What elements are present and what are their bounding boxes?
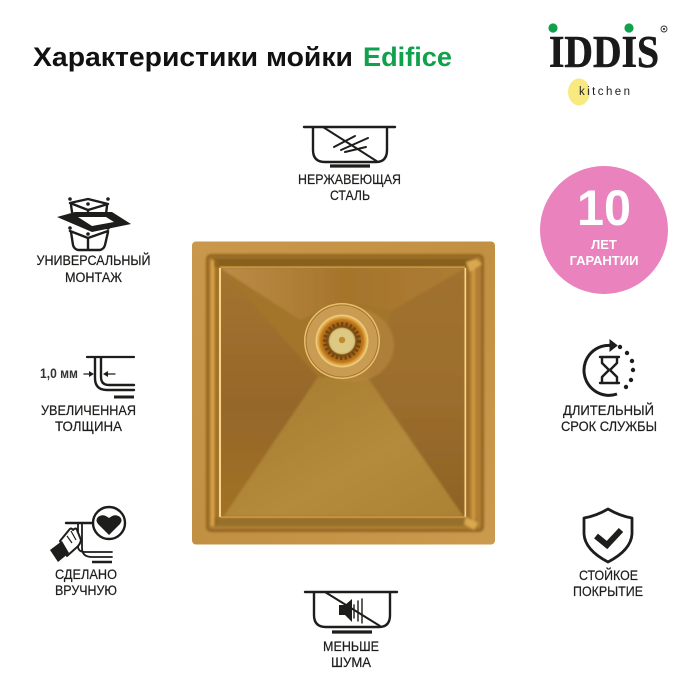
logo yellow blob — [568, 78, 590, 106]
label — [573, 566, 643, 599]
sink bowl — [206, 254, 484, 532]
label — [561, 401, 657, 434]
feature: handmade — [50, 507, 125, 598]
label: СДЕЛАНО — [55, 566, 117, 582]
label: СТАЛЬ — [330, 187, 370, 203]
sink photo — [192, 242, 495, 544]
icon: hourglass with circular arrow — [584, 340, 635, 395]
badge text: ЛЕТ — [591, 237, 617, 252]
feature: increased thickness — [40, 357, 136, 434]
label: УВЕЛИЧЕННАЯ — [41, 402, 136, 418]
badge text: ГАРАНТИИ — [570, 253, 638, 268]
feature: universal mounting — [36, 197, 150, 285]
icon: sink with scratches — [304, 127, 395, 166]
logo kitchen label: kitchen — [579, 86, 630, 98]
logo wordmark: IDDIS — [549, 27, 659, 77]
label: МЕНЬШЕ — [323, 638, 379, 654]
logo registered mark — [661, 26, 667, 32]
feature: stainless steel — [298, 127, 401, 203]
icon: stacked sinks with plate — [57, 197, 131, 250]
warranty badge — [540, 166, 668, 294]
label — [323, 638, 379, 670]
feature: durable coating — [573, 509, 643, 599]
sink rim — [192, 242, 495, 544]
label: ТОЛЩИНА — [55, 418, 123, 434]
logo: iddis kitchen — [548, 23, 667, 105]
badge number: 10 — [577, 180, 631, 236]
label: СРОК СЛУЖБЫ — [561, 418, 657, 434]
thickness value: 1,0 мм — [40, 365, 78, 381]
icon: wall section with arrows — [84, 357, 134, 397]
label — [36, 251, 150, 285]
feature: long service life — [561, 340, 657, 434]
label: ПОКРЫТИЕ — [573, 583, 643, 599]
feature: less noise — [305, 592, 397, 670]
label — [298, 171, 401, 203]
label — [55, 566, 117, 598]
label: МОНТАЖ — [65, 269, 122, 285]
sink floor edge highlights — [219, 266, 466, 518]
icon: hand and heart on sink — [50, 507, 125, 562]
badge text — [570, 237, 638, 268]
logo green dots — [548, 23, 634, 33]
icon: sink with speaker — [305, 592, 397, 632]
icon: shield with check — [584, 509, 632, 562]
label — [41, 402, 136, 434]
label: ДЛИТЕЛЬНЫЙ — [563, 401, 654, 418]
sink drain — [304, 303, 394, 382]
label: НЕРЖАВЕЮЩАЯ — [298, 171, 401, 187]
title: Характеристики мойки — [33, 42, 353, 72]
label: УНИВЕРСАЛЬНЫЙ — [36, 251, 150, 268]
label: СТОЙКОЕ — [579, 566, 638, 583]
badge circle — [540, 166, 668, 294]
label: ШУМА — [331, 654, 372, 670]
label: ВРУЧНУЮ — [55, 582, 117, 598]
title: Edifice — [363, 42, 452, 72]
